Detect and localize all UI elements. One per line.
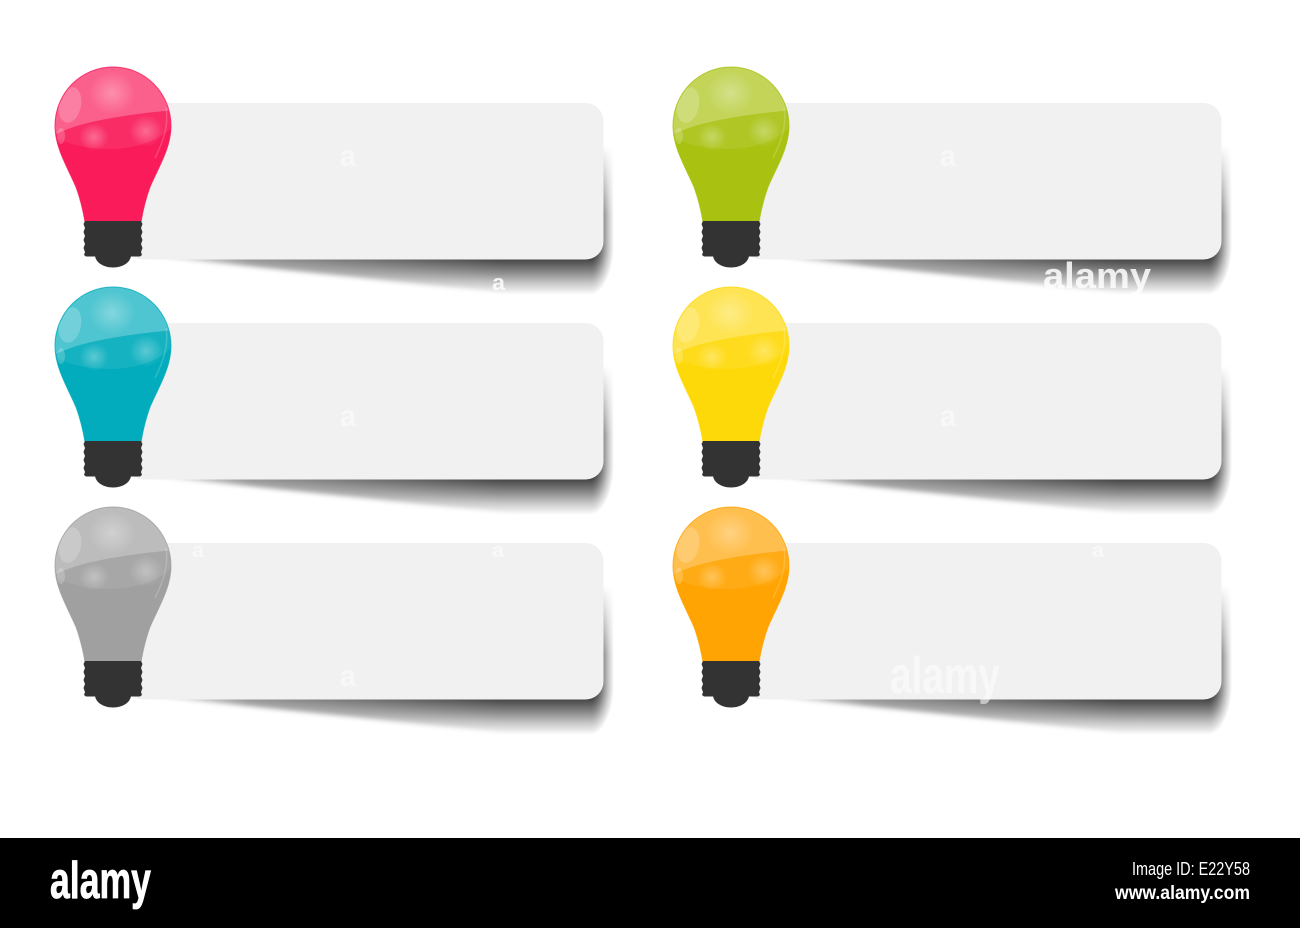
watermarks: a	[1092, 540, 1105, 562]
watermarks: a	[340, 660, 356, 693]
panel: orange bulb banner	[668, 500, 1234, 737]
banner card: pink	[125, 103, 616, 297]
panel: yellow bulb banner	[668, 280, 1234, 517]
watermarks: a	[192, 540, 205, 562]
website: www.alamy.com	[1114, 883, 1250, 904]
panel: green bulb banner	[668, 60, 1234, 297]
icon: pink light bulb	[50, 60, 175, 268]
banner card: teal	[125, 323, 616, 517]
watermarks: a	[940, 140, 956, 173]
watermarks: a	[340, 400, 356, 433]
banner card: grey	[125, 543, 616, 737]
watermarks	[192, 140, 1151, 705]
watermarks: a	[340, 140, 356, 173]
watermarks: alamy	[1043, 255, 1151, 296]
watermarks: a	[940, 400, 956, 433]
footer logo: alamy	[50, 852, 151, 910]
banner card: orange	[743, 543, 1234, 737]
icon: grey light bulb	[50, 500, 175, 708]
banner card: green	[743, 103, 1234, 297]
icon: teal light bulb	[50, 280, 175, 488]
panel: grey bulb banner	[50, 500, 616, 737]
icon: yellow light bulb	[668, 280, 793, 488]
icon: green light bulb	[668, 60, 793, 268]
watermarks: a	[492, 540, 505, 562]
footer bar	[0, 838, 1300, 928]
panel: pink bulb banner	[50, 60, 616, 297]
image id: Image ID: E22Y58	[1132, 859, 1250, 879]
icon: orange light bulb	[668, 500, 793, 708]
panel: teal bulb banner	[50, 280, 616, 517]
watermarks: alamy	[890, 647, 1000, 705]
watermarks: a	[492, 270, 506, 295]
banner card: yellow	[743, 323, 1234, 517]
